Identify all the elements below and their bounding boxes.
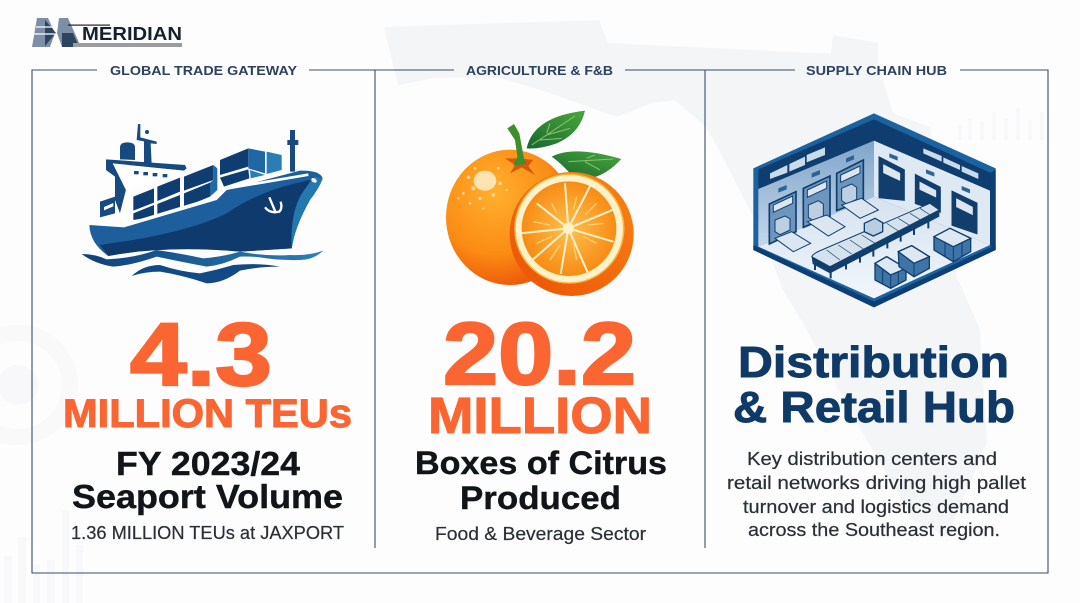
title: distribution and retail hub xyxy=(733,338,1015,432)
icon: oranges xyxy=(446,111,634,296)
description text: turnover and logistics demand xyxy=(743,497,1009,517)
outer frame with section dividers xyxy=(32,70,1048,573)
label: boxes of citrus produced: Produced xyxy=(460,480,621,516)
heading: agriculture and F&B: AGRICULTURE & F&B xyxy=(466,63,613,78)
title: distribution and retail hub: Distribution xyxy=(738,338,1009,387)
description text: Key distribution centers and xyxy=(747,449,997,469)
panel: supply chain hub xyxy=(727,63,1026,540)
title: distribution and retail hub: & Retail Hub xyxy=(733,383,1015,432)
label: boxes of citrus produced: Boxes of Citrus xyxy=(415,445,667,481)
stat: 20.2: 20.2 xyxy=(443,304,636,403)
description text: retail networks driving high pallet xyxy=(727,473,1026,493)
label: FY 2023/24 seaport volume xyxy=(72,445,343,515)
label: boxes of citrus produced xyxy=(415,445,667,516)
description text xyxy=(727,449,1026,540)
label: FY 2023/24 seaport volume: Seaport Volume xyxy=(72,478,343,515)
note: JAXPORT volume: 1.36 MILLION TEUs at JAXPORT xyxy=(71,523,344,543)
note: food and beverage sector: Food & Beverage Sector xyxy=(435,524,646,544)
stat: 4.3: 4.3 xyxy=(130,304,272,404)
stat unit: million TEUs: MILLION TEUs xyxy=(63,392,352,436)
icon: isometric warehouse xyxy=(753,113,996,307)
description text: across the Southeast region. xyxy=(748,520,1000,540)
panel: agriculture and food and beverage xyxy=(415,63,667,544)
heading: supply chain hub: SUPPLY CHAIN HUB xyxy=(806,63,947,78)
label: FY 2023/24 seaport volume: FY 2023/24 xyxy=(116,445,301,482)
stat unit: million: MILLION xyxy=(428,387,652,444)
logo: MERIDIAN xyxy=(82,24,182,44)
panel: global trade gateway xyxy=(63,63,352,543)
heading: global trade gateway: GLOBAL TRADE GATEWAY xyxy=(110,63,297,78)
logo xyxy=(32,18,182,47)
icon: container ship xyxy=(82,124,323,283)
